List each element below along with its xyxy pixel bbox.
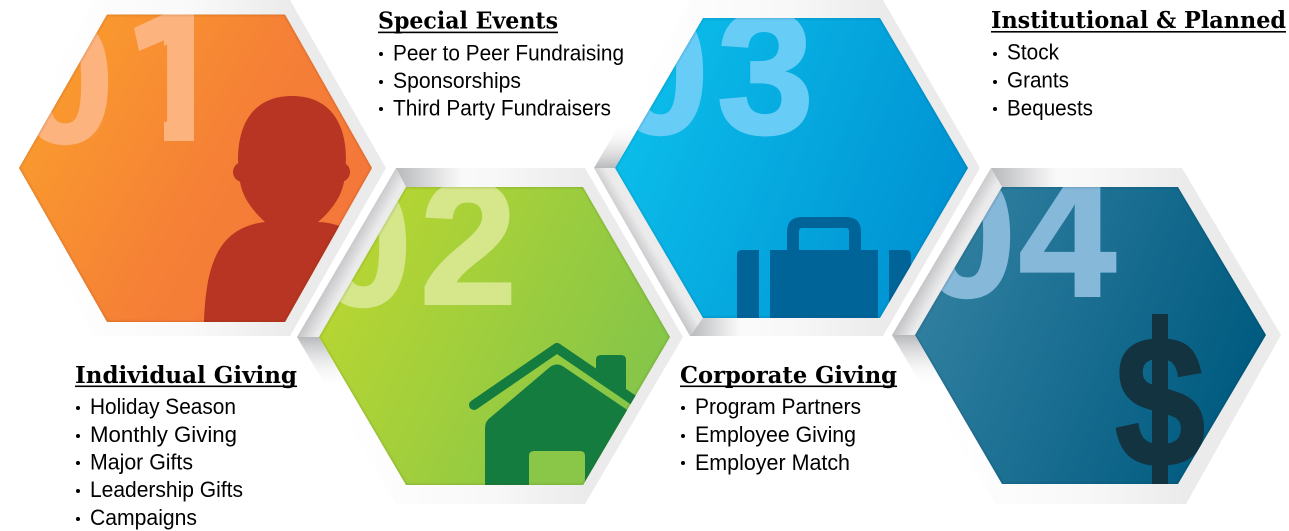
- number 04: [941, 187, 1116, 300]
- hexagon 03 fill: [615, 18, 968, 318]
- number 02: [340, 187, 512, 308]
- list: Individual Giving items: [76, 394, 243, 530]
- hexagon 02 fill: [319, 187, 670, 485]
- list: Corporate Giving items: Employee Giving: [695, 422, 856, 447]
- list: Institutional items: Bequests: [1007, 96, 1093, 120]
- list: Institutional items: Grants: [1007, 68, 1069, 92]
- list: Corporate Giving items: Program Partners: [695, 394, 861, 419]
- text block: Individual Giving: [75, 361, 297, 530]
- panel: hexagon 03 corporate giving: [594, 0, 980, 336]
- list: Individual Giving items: Major Gifts: [90, 450, 193, 474]
- hexagon 02 lower-left shaded edge: [297, 337, 352, 395]
- hexagon 03 bottom shaded edge: [690, 318, 745, 336]
- list: Institutional items: [993, 40, 1093, 120]
- hexagon 03 frame: [594, 0, 980, 336]
- list: Special Events items: [379, 40, 624, 120]
- panel: hexagon 01 individual giving: [0, 0, 386, 336]
- panel: hexagon 04 institutional and planned: [892, 138, 1281, 505]
- hexagon 04 lower-left shaded edge: [892, 335, 948, 393]
- list: Special Events items: Peer to Peer Fundraising: [393, 40, 624, 66]
- list: Individual Giving items: Leadership Gifts: [90, 477, 243, 502]
- hexagon 04 inner edge shadow: [915, 187, 1266, 484]
- hexagon 02 frame: [297, 168, 683, 504]
- hexagon 03 lower-left shaded edge: [594, 168, 703, 336]
- hexagon 02 inner edge shadow: [319, 187, 670, 485]
- list: Individual Giving items: Campaigns: [90, 505, 197, 530]
- list: Individual Giving items: Monthly Giving: [90, 422, 237, 447]
- hexagon 02 upper-left shaded edge: [297, 168, 406, 337]
- hexagon 03 upper-left shaded edge: [594, 115, 645, 168]
- number 02: 0: [315, 147, 412, 342]
- number 01: [38, 14, 194, 146]
- hexagon 01 frame: [0, 0, 386, 336]
- heading: Special Events: Special Events: [378, 6, 558, 34]
- hexagon 01 inner edge shadow: [19, 14, 372, 322]
- icon: house: [474, 348, 645, 485]
- list: Institutional items: Stock: [1007, 40, 1060, 64]
- number 02: 2: [420, 146, 517, 340]
- hexagon 04 frame: [892, 168, 1281, 504]
- text block: Corporate Giving: [680, 361, 897, 475]
- list: Special Events items: Sponsorships: [393, 68, 521, 93]
- list: Corporate Giving items: Employer Match: [695, 450, 850, 475]
- heading: Corporate Giving: Corporate Giving: [680, 361, 897, 389]
- hexagon 04 top shaded edge: [991, 168, 1065, 187]
- icon: person: [204, 96, 350, 322]
- hexagon 01 fill: [19, 14, 372, 322]
- list: Individual Giving items: Holiday Season: [90, 394, 236, 419]
- hexagon 03 inner edge shadow: [615, 18, 968, 318]
- hexagon 02 top shaded edge: [396, 168, 470, 187]
- list: Special Events items: Third Party Fundraisers: [393, 96, 611, 120]
- list: Corporate Giving items: [681, 394, 861, 475]
- text block: Institutional and Planned: [991, 6, 1286, 120]
- number 04: 0: [919, 138, 1016, 333]
- text block: Special Events: [378, 6, 624, 120]
- hexagon 04 upper-left shaded edge: [892, 168, 1002, 335]
- panel: hexagon 02 special events: [297, 146, 683, 504]
- hexagon 04 fill: [915, 187, 1266, 484]
- icon: dollar sign: $: [1115, 297, 1205, 505]
- heading: Individual Giving: Individual Giving: [75, 361, 297, 389]
- number 03: [637, 18, 809, 136]
- icon: briefcase: [737, 217, 911, 318]
- number 04: 4: [1019, 138, 1116, 332]
